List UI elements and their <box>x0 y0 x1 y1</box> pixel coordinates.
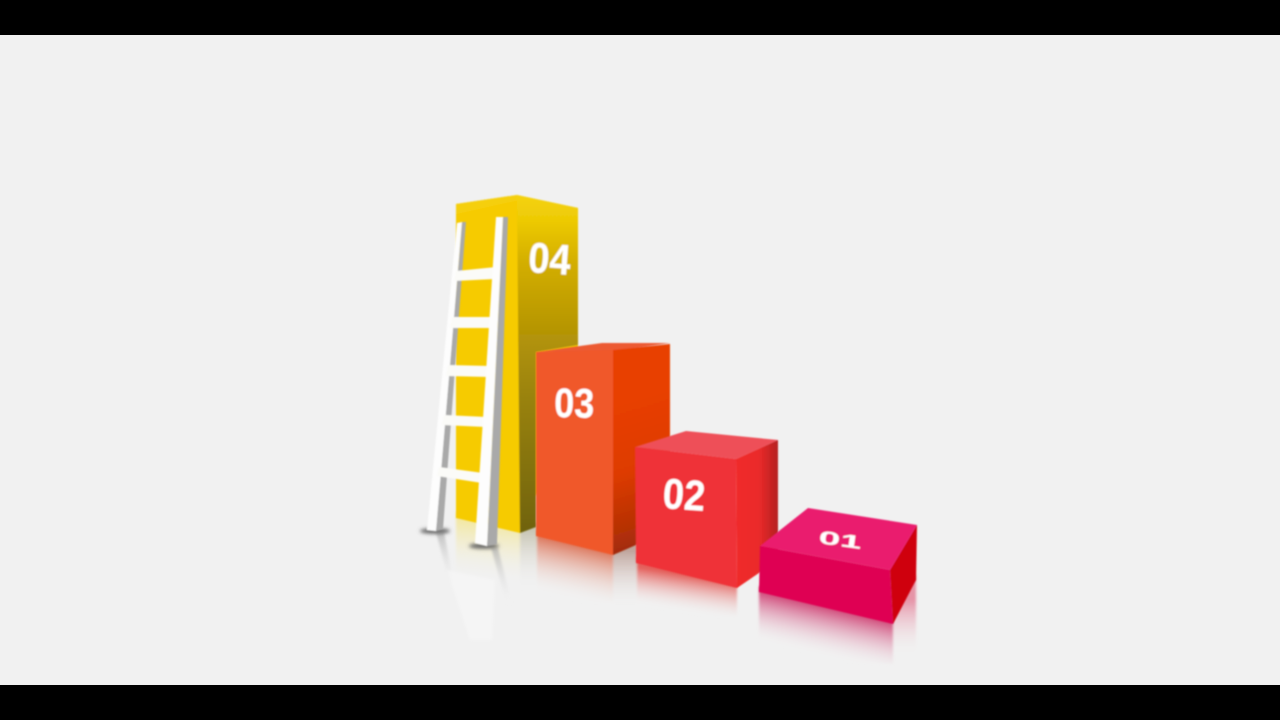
label 04: 04 <box>527 233 573 284</box>
left rail <box>427 222 466 531</box>
label 02: 02 <box>661 469 707 520</box>
ladder <box>420 217 508 549</box>
block 04: yellow column <box>456 195 578 533</box>
rungs <box>437 267 496 483</box>
floor reflections <box>436 512 916 664</box>
right rail <box>475 217 508 546</box>
label 01: 01 <box>817 528 863 553</box>
ladder shadows <box>420 528 499 549</box>
label 03: 03 <box>554 381 595 427</box>
block 03: orange <box>536 343 670 555</box>
block 01: magenta <box>759 508 917 624</box>
block 02: red <box>635 431 778 588</box>
